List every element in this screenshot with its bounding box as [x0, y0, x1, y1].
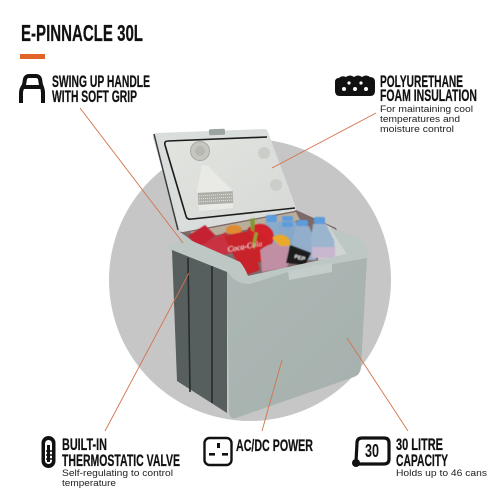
capacity heading: 30 LITRE — [396, 435, 443, 454]
valve description: Self-regulating to control — [62, 468, 173, 478]
red peppers — [226, 218, 273, 262]
title: E-PINNACLE 30L — [21, 20, 143, 46]
mixed food pack — [260, 234, 311, 272]
callout: AC/DC power — [204, 436, 313, 465]
cooler front body — [168, 228, 367, 418]
mixed food pack: PEP — [293, 254, 306, 263]
front handle recess — [288, 263, 332, 280]
callout: polyurethane foam: moisture control — [380, 124, 454, 134]
handle heading: SWING UP HANDLE — [52, 72, 150, 91]
cola cans — [188, 225, 263, 276]
background circle — [109, 139, 391, 421]
lid vent fan — [190, 142, 210, 160]
rim — [168, 228, 367, 284]
icon: thermometer — [42, 436, 56, 468]
leader lines — [80, 108, 408, 431]
foam description: For maintaining cool — [380, 104, 473, 114]
cooler interior — [180, 210, 347, 280]
icon: foam insulation — [335, 76, 375, 96]
capacity description: Holds up to 46 cans — [396, 468, 488, 478]
icon: handle — [21, 76, 43, 103]
dark side panel — [172, 250, 227, 413]
valve heading: BUILT-IN — [62, 435, 107, 454]
water bottles — [262, 215, 335, 260]
lid — [153, 129, 296, 232]
callout: thermostatic valve: THERMOSTATIC VALVE — [62, 451, 180, 470]
callout: 30 litre capacity: CAPACITY — [396, 451, 448, 470]
cooler illustration — [153, 129, 367, 418]
callout: polyurethane foam: temperatures and — [380, 114, 460, 124]
callout: thermostatic valve — [42, 435, 180, 488]
callout: polyurethane foam — [335, 72, 477, 134]
callout: 30 litre capacity — [352, 435, 488, 478]
callout: swing up handle — [21, 72, 150, 106]
callout: swing up handle: WITH SOFT GRIP — [52, 87, 137, 106]
title accent bar — [20, 54, 45, 59]
cola cans: Coca-Cola — [227, 239, 263, 254]
power heading: AC/DC POWER — [236, 436, 313, 455]
icon: 30 litre tank: 30 — [365, 441, 379, 461]
icon: plug socket — [204, 438, 232, 465]
callout: thermostatic valve: temperature — [62, 478, 116, 488]
